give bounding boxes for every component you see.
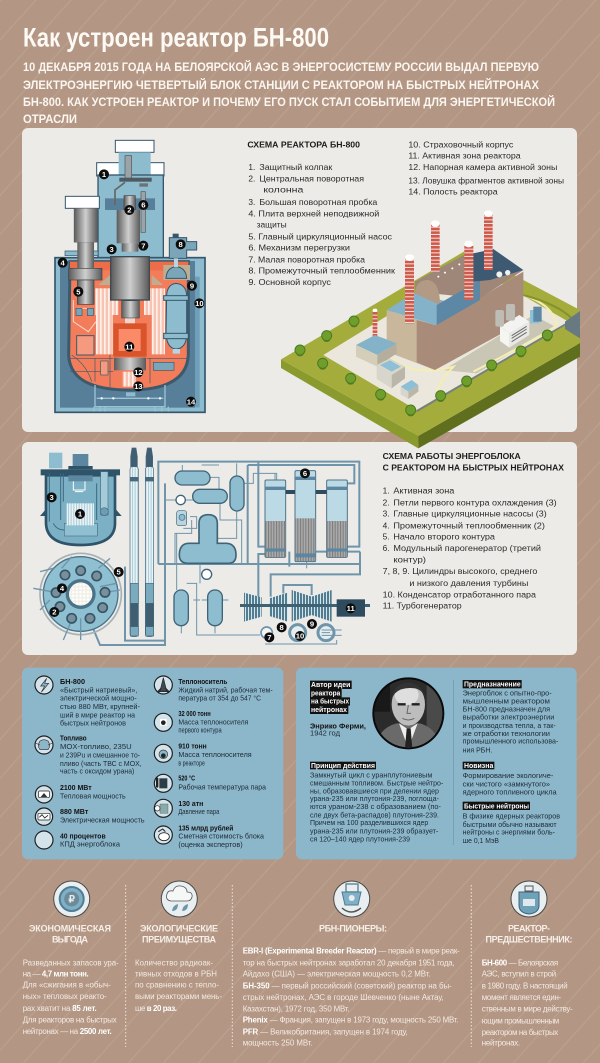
fact text: 520 °С [178,774,195,783]
reactor legend [247,139,564,287]
panel: key facts [22,668,283,859]
power unit legend: 11. Турбогенератор [383,600,462,610]
column: ecological benefits: ЭКОЛОГИЧЕСКИЕ [140,924,218,934]
reactor legend: СХЕМА РЕАКТОРА БН-800 [247,139,360,149]
column: predecessor reactor: БН-600 — Белоярская [482,959,558,968]
number markers: 10 [296,632,304,641]
principle of operation: урана-235 или плутония-239 образует- [310,826,439,835]
number markers: 4 [61,258,66,267]
number markers: 11 [347,604,355,613]
number markers: 7 [267,633,271,642]
column: predecessor reactor: РЕАКТОР- [508,924,550,934]
column: fast reactor pioneers: EBR-I (Experimental Breeder Reactor) — первый в мире реак- [243,947,460,956]
novelty: Формирование экологиче- [463,771,554,780]
fact text: Давление пара [178,807,220,816]
icon: cloud with drops [161,881,197,917]
column: predecessor reactor [482,924,573,1048]
power unit legend: 1. [383,486,390,496]
power unit legend: Промежуточный теплообменник (2) [393,520,545,530]
principle of operation: смешанным топливом. Быстрые нейтро- [310,778,444,787]
author label: реактора [311,688,341,697]
fact text: (оценка экспертов) [178,840,243,849]
power unit legend: 4. [383,520,390,530]
power unit legend: 3. [383,509,390,519]
fact text: ший в мире реактор на [60,710,136,719]
column: fast reactor pioneers: Айдахо (США) — электрическая мощность 0,2 МВт. [243,970,431,979]
panel: author and purpose [296,668,577,859]
reactor legend: 5. Главный циркуляционный насос [248,231,392,241]
purpose: и производства тепла, а так- [463,721,556,730]
column: economic benefit: рах хватит на 85 лет. [23,1004,97,1013]
reactor legend: 6. Механизм перегрузки [248,242,350,252]
power unit legend: Петли первого контура охлаждения (3) [393,497,557,507]
purpose: выработки электроэнергии [463,713,554,722]
panel: reactor scheme [22,128,580,448]
purpose: БН-800 предназначен для [463,704,550,713]
column: ecological benefits: ПРЕИМУЩЕСТВА [142,935,216,945]
intro text: БН-800. КАК УСТРОЕН РЕАКТОР И ПОЧЕМУ ЕГО ПУСК СТАЛ СОБЫТИЕМ ДЛЯ ЭНЕРГЕТИЧЕСКОЙ [23,94,555,109]
power unit legend: Активная зона [393,486,455,496]
turbine [240,590,370,641]
fact text: 2100 МВт [60,783,92,792]
column: fast reactor pioneers: PFR — Великобритания, запущен в 1974 году, [243,1027,408,1036]
number markers: 2 [52,608,56,617]
novelty: ски чистого «замкнутого» [463,779,550,788]
power unit legend: 10. Конденсатор отработанного пара [383,589,536,599]
power unit legend: 5. [383,532,390,542]
number markers: 8 [179,240,184,249]
column: ecological benefits: тивных отходов в РБН [135,970,217,979]
reactor legend: защиты [257,219,287,229]
number markers: 5 [76,287,81,296]
reactor legend: 14. Полость реактора [408,186,498,196]
small buildings [356,304,580,399]
number markers: 8 [280,623,285,632]
number markers: 9 [310,620,314,629]
reactor legend: 8. Промежуточный теплообменник [248,266,395,276]
power unit legend: Главные циркуляционные насосы (3) [393,509,547,519]
title: Как устроен реактор БН-800 [23,22,329,52]
fact text: пливо (часть ТВС с MOX, [60,759,142,768]
power unit legend: 7, 8, 9. Цилиндры высокого, среднего [383,566,538,576]
main building [387,249,523,370]
number markers: 1 [78,510,83,519]
reactor legend: 13. Ловушка фрагментов активной зоны [408,175,564,185]
column: fast reactor pioneers: РБН-ПИОНЕРЫ: [319,924,387,934]
reactor plan view [33,553,121,640]
purpose: Предназначение [464,680,521,689]
active zone [113,323,147,387]
fact text: в реакторе [178,758,205,767]
reactor legend: 12. Напорная камера активной зоны [408,162,557,172]
column: ecological benefits: ше в 20 раз. [135,1004,177,1013]
column: predecessor reactor: реактором на быстрых [482,1028,558,1037]
column: predecessor reactor: АЭС, вступил в строй [482,970,556,979]
column: economic benefit: Для «сжигания в «обыч- [23,981,111,990]
reactor legend: Большая поворотная пробка [259,197,378,207]
number markers: 2 [127,206,131,215]
principle of operation: Принцип действия [311,761,375,770]
number markers: 3 [110,245,114,254]
number markers: 12 [134,368,143,377]
power unit legend: Модульный парогенератор (третий [393,543,541,553]
column: predecessor reactor: ющим промышленным [482,1016,559,1025]
chimneys [373,210,493,342]
purpose: же отработки технологии [463,729,550,738]
principle of operation: ся 120–140 ядер плутония-239 [310,835,410,844]
fact text: Жидкий натрий, рабочая тем- [178,685,273,694]
column: economic benefit: Разведанных запасов ура- [23,959,119,968]
fast neutrons: быстрыми обычно называют [463,820,557,829]
fact text: электрической мощно- [60,694,137,703]
fact text: Рабочая температура пара [178,782,267,791]
fact text: КПД энергоблока [60,840,121,849]
power unit legend [383,451,564,610]
purpose: мышленным реактором [463,697,550,706]
author label [310,680,352,714]
column: ecological benefits: Количество радиоак- [135,959,213,968]
purpose: промышленного использова- [463,737,559,746]
intermediate heat exchanger [163,234,197,354]
fact text: БН-800 [60,677,85,686]
reactor legend: 10. Страховочный корпус [408,139,513,149]
column: ecological benefits [135,924,222,1013]
fact text: и 239Pu и смешанное то- [60,750,140,759]
fast neutrons: ше 0,1 МэВ [463,836,499,845]
fact text: Топливо [60,733,87,742]
column: economic benefit: ВЫГОДА [52,935,88,945]
fact text: Тепловая мощность [60,791,126,800]
fact text: Сметная стоимость блока [178,832,265,841]
fact text: первого контура [178,726,222,735]
pipes [92,462,360,645]
number markers: 6 [303,469,307,478]
number markers: 3 [50,493,54,502]
principle of operation: урана-235 или плутония-239, поглоща- [310,794,439,803]
heat exchange tubes [130,448,154,637]
number markers: 7 [141,241,145,250]
fact text: пература от 354 до 547 °С [178,694,261,703]
fact text: «Быстрый натриевый», [60,685,137,694]
icon: predecessor reactor [511,881,547,917]
number markers: 13 [134,382,143,391]
number markers: 9 [190,281,194,290]
author name: Энрико Ферми, [310,721,366,730]
reactor legend: 2. [248,174,255,184]
number markers: 10 [195,299,204,308]
power unit legend: СХЕМА РАБОТЫ ЭНЕРГОБЛОКА [383,451,521,461]
fact icons [35,676,172,849]
reactor section [40,453,122,545]
column: predecessor reactor: в 1980 году. В настоящий [482,981,568,990]
steam generators [265,471,347,562]
fact text: Теплоноситель [178,677,228,686]
pump column [69,208,102,355]
column: fast reactor pioneers: мощность 250 МВт. [243,1039,313,1048]
fact text: Электрическая мощность [60,815,145,824]
column: predecessor reactor: ПРЕДШЕСТВЕННИК: [486,935,572,945]
fast neutrons: нейтроны с энергиями боль- [463,828,555,837]
column: fast reactor pioneers [243,924,460,1048]
column: fast reactor pioneers: тор на быстрых нейтронах заработал 20 декабря 1951 года, [243,959,455,968]
tanks [174,471,244,626]
icon: ruble coin: ₽ [69,894,76,906]
number markers: 6 [141,201,145,210]
power unit legend: С РЕАКТОРОМ НА БЫСТРЫХ НЕЙТРОНАХ [383,462,564,473]
power unit legend: 2. [383,497,390,507]
fact text: 130 атн [178,799,204,808]
column: economic benefit: ных» тепловых реакто- [23,992,107,1001]
fact text: стью 880 МВт, крупней- [60,702,140,711]
purpose: Энергоблок с опытно-про- [463,688,552,697]
power unit legend: Начало второго контура [393,532,495,542]
column: economic benefit [23,924,119,1036]
reactor cross-section [55,140,205,412]
power unit legend: 6. [383,543,390,553]
power unit legend: и низкого давления турбины [409,578,528,588]
intro text [23,59,555,126]
number markers: 4 [60,584,65,593]
author label: нейтронах [311,705,348,714]
power unit diagram [33,448,370,645]
isometric power plant [281,210,580,448]
intro text: 10 ДЕКАБРЯ 2015 ГОДА НА БЕЛОЯРСКОЙ АЭС В ЭНЕРГОСИСТЕМУ РОССИИ ВЫДАЛ ПЕРВУЮ [23,59,539,74]
column: ecological benefits: выми реакторами мень- [135,992,222,1001]
number markers: 11 [125,342,134,351]
number markers: 1 [102,170,107,179]
reactor legend: 4. Плита верхней неподвижной [248,208,380,218]
power unit legend: контур) [393,554,426,564]
author label: на быстрых [311,697,350,706]
author name [310,721,366,738]
novelty: ядерного топливного цикла [463,788,557,797]
number markers [58,169,204,407]
principle of operation: ны, образовавшиеся при делении ядер [310,786,439,795]
reactor legend: 1. [248,162,255,172]
principle of operation: сле двух бета-распадов) плутония-239. [310,810,439,819]
panel: power unit scheme [22,442,577,655]
reactor legend: 3. [248,197,255,207]
fast neutrons: В физике ядерных реакторов [463,812,560,821]
reactor legend: Защитный колпак [259,162,333,172]
fact text: быстрых нейтронов [60,718,126,727]
number markers [47,468,356,642]
column: fast reactor pioneers: Казахстан), 1972 год, 350 МВт. [243,1005,350,1014]
rotating plug [111,257,149,324]
fact text: 910 тонн [178,742,207,751]
purpose: ния РБН. [463,745,492,754]
principle of operation [310,761,444,844]
column: economic benefit: ЭКОНОМИЧЕСКАЯ [29,924,111,934]
column: ecological benefits: по сравнению с тепло- [135,981,219,990]
reactor legend: 7. Малая поворотная пробка [248,254,365,264]
novelty: Новизна [464,761,494,770]
column: fast reactor pioneers: БН-350 — первый российский (советский) реактор на бы- [243,981,452,990]
column: fast reactor pioneers: Phenix — Франция, запущен в 1973 году, мощность 250 МВт. [243,1016,459,1025]
fact text: Масса теплоносителя [178,750,252,759]
author label: Автор идеи [311,680,351,689]
author name: 1942 год [310,729,341,738]
fact text: MOX-топливо, 235U [60,742,132,751]
principle of operation: Замкнутый цикл с уранплутониевым [310,771,432,780]
fact text [60,677,273,849]
intro text: ОТРАСЛИ [23,112,77,126]
fact text: 135 млрд рублей [178,823,234,832]
reactor legend: 9. Основной корпус [248,277,331,287]
fact text: часть с оксидом урана) [60,767,135,776]
column: fast reactor pioneers: стрых нейтронах, АЭС в городе Шевченко (ныне Актау, [243,993,444,1002]
fact text: 880 МВт [60,807,89,816]
number markers: 14 [187,397,196,406]
fast neutrons: Быстрые нейтроны [464,801,529,810]
dividers [126,885,471,1047]
portrait [372,677,447,752]
reactor legend: колонна [263,185,304,195]
fact text: 40 процентов [60,831,106,840]
column: predecessor reactor: нейтронах. [482,1039,520,1048]
intro text: ЭЛЕКТРОЭНЕРГИЮ ЧЕТВЕРТЫЙ БЛОК СТАНЦИИ С РЕАКТОРОМ НА БЫСТРЫХ НЕЙТРОНАХ [23,77,540,92]
column: economic benefit: нейтронах — на 2500 лет. [23,1027,112,1036]
column: economic benefit: на — 4,7 млн тонн. [23,970,89,979]
icon: pioneer reactor [334,881,370,917]
reactor legend: 11. Активная зона реактора [408,150,521,160]
icon: ruble coin [54,881,90,917]
purpose [463,680,559,754]
column: predecessor reactor: момент является един- [482,993,562,1002]
column: economic benefit: Для реакторов на быстрых [23,1016,117,1025]
novelty [463,761,557,797]
heat exchangers [95,275,165,354]
vessel base [94,385,168,412]
fast neutrons [463,801,560,845]
principle of operation: ются ураном-238 с образованием (по- [310,802,441,811]
reactor legend: Центральная поворотная [259,174,364,184]
land [281,250,580,448]
fact text: Масса теплоносителя [178,717,248,726]
number markers: 5 [117,568,122,577]
principle of operation: Причем на 100 разделившихся ядер [310,818,428,827]
trees [295,316,552,416]
fact text: 32 000 тонн [178,709,211,718]
column: predecessor reactor: ственным в мире действу- [482,1005,573,1014]
